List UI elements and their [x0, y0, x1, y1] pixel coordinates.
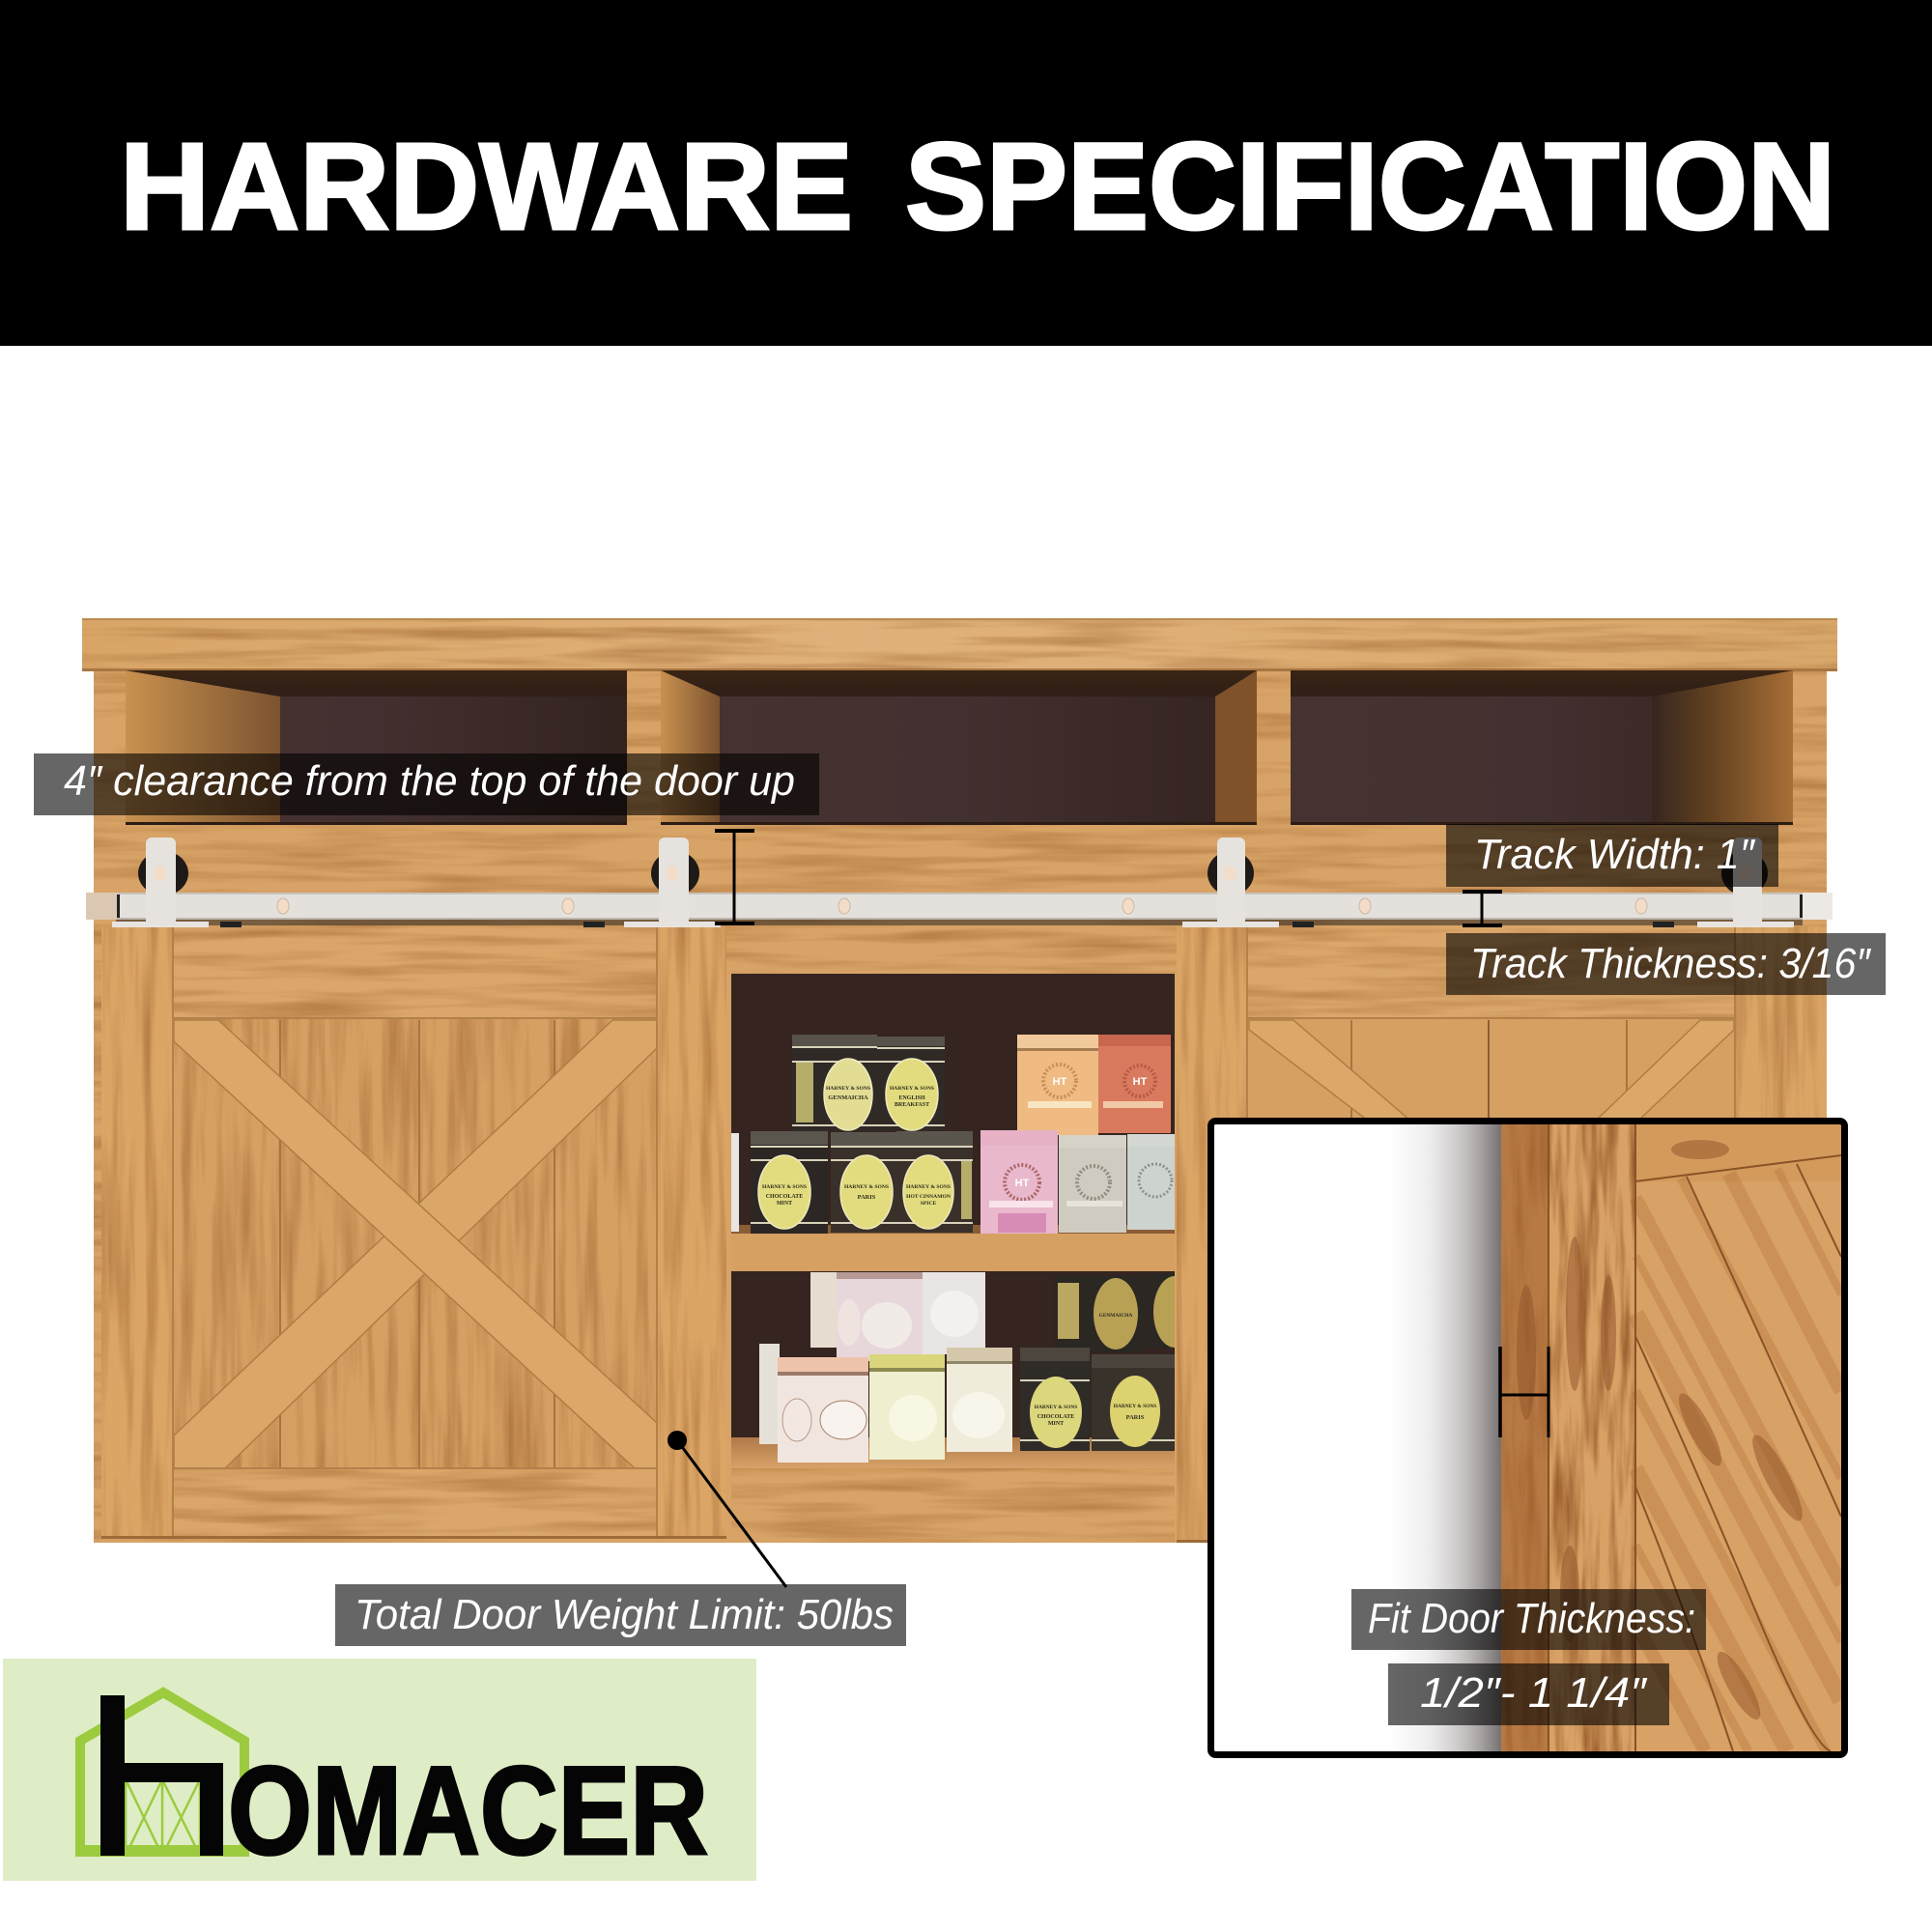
tin: Chocolate Mint lower: CHOCOLATE: [1037, 1414, 1074, 1420]
tin: English Breakfast: [877, 1037, 945, 1130]
weight pointer: [668, 1431, 786, 1587]
X brace: [174, 1020, 657, 1468]
tin: Chocolate Mint: [751, 1131, 828, 1234]
logo: Homacer: [3, 1659, 756, 1881]
callout: track thickness: Track Thickness: 3/16″: [1470, 940, 1871, 987]
measure: track width: [1463, 892, 1502, 925]
tin: English Breakfast: HARNEY & SONS: [890, 1086, 934, 1092]
tin: red: [1098, 1035, 1171, 1133]
measure: clearance height: [715, 831, 754, 923]
tin: Chocolate Mint: MINT: [777, 1201, 792, 1207]
logo door cross: [120, 1776, 205, 1856]
callout: clearance: 4″ clearance from the top of the door up: [64, 757, 795, 805]
tin: Genmaicha: [792, 1035, 877, 1131]
door panel: [173, 1018, 657, 1468]
tin: Paris lower: [1092, 1354, 1175, 1451]
tin: pink: [980, 1130, 1058, 1234]
cabinet floor: [731, 1437, 1175, 1468]
tea tins: [730, 1035, 1196, 1463]
tin: lilac patterned: [837, 1272, 923, 1361]
measure: door thickness: [1500, 1347, 1548, 1437]
tin: cream patterned: [947, 1348, 1012, 1452]
panel seams: [1548, 1124, 1841, 1751]
door close-up wood: [1501, 1124, 1841, 1751]
tin: Paris: HARNEY & SONS: [844, 1184, 889, 1190]
tin: white back lower: [759, 1344, 780, 1444]
tin: orange: HT: [1053, 1076, 1067, 1088]
logo wordmark: OMACER: [228, 1740, 708, 1881]
tin: Chocolate Mint: HARNEY & SONS: [762, 1184, 807, 1190]
track bolts: [277, 898, 1647, 914]
inset frame: [1211, 1121, 1845, 1754]
hanger 2: [624, 838, 721, 927]
tin: white right: [923, 1272, 985, 1354]
centre open shelves: [726, 974, 1177, 1542]
tin: orange: [1017, 1035, 1098, 1135]
right end stop: [1800, 893, 1833, 920]
hanger 1: [112, 838, 209, 927]
open cubby: centre: [661, 670, 1257, 825]
door panel: [1247, 1018, 1735, 1124]
tin: Chocolate Mint lower: MINT: [1048, 1421, 1064, 1427]
right barn door: [1177, 926, 1827, 1543]
tin: Chocolate Mint lower: [1020, 1348, 1090, 1451]
shelf board: [731, 1225, 1175, 1235]
hanger 4: [1697, 838, 1794, 927]
tin: Hot Cinnamon Spice: HARNEY & SONS: [906, 1184, 951, 1190]
stiles and rails: [101, 926, 173, 1538]
tin: white sliver: [731, 1133, 739, 1232]
tin: dark gold upper left: GENMAICHA: [1099, 1313, 1132, 1319]
title: HARDWARE: [120, 118, 853, 256]
small black spacers: [220, 922, 1674, 927]
tin: Chocolate Mint: CHOCOLATE: [766, 1194, 803, 1200]
tin: Paris lower: HARNEY & SONS: [1114, 1404, 1156, 1409]
tin: English Breakfast: ENGLISH: [898, 1095, 925, 1101]
left barn door: [101, 926, 726, 1539]
tin: dark gold upper left: [1055, 1275, 1145, 1352]
tin: Hot Cinnamon Spice: [896, 1131, 973, 1233]
tin: peach patterned: [778, 1357, 868, 1463]
logo H: [100, 1695, 223, 1856]
callout: door weight: Total Door Weight Limit: 50lbs: [355, 1591, 894, 1638]
tin: red: HT: [1133, 1076, 1148, 1088]
open cubby: right: [1291, 670, 1793, 825]
tin: Genmaicha: HARNEY & SONS: [826, 1086, 870, 1092]
tin: Chocolate Mint lower: HARNEY & SONS: [1035, 1405, 1077, 1410]
callout: thickness range: 1/2″- 1 1/4″: [1420, 1669, 1648, 1717]
callout: track width: Track Width: 1″: [1474, 831, 1755, 878]
diagonal wood grain: [1635, 1169, 1841, 1751]
tin: Hot Cinnamon Spice: HOT CINNAMON: [906, 1194, 951, 1200]
inset: door thickness close-up: [1211, 1121, 1845, 1754]
top board: [82, 618, 1837, 671]
hanger 3: [1182, 838, 1279, 927]
title: SPECIFICATION: [905, 118, 1835, 256]
callout: fit door thickness: [1351, 1589, 1706, 1650]
header band: [0, 0, 1932, 346]
tin: English Breakfast: BREAKFAST: [895, 1102, 929, 1108]
tin: Paris: PARIS: [858, 1194, 876, 1201]
tin: grey: [1059, 1135, 1126, 1233]
tin: yellow-green patterned: [869, 1354, 945, 1460]
tin: Paris lower: PARIS: [1126, 1414, 1145, 1421]
shadow fade: [1391, 1124, 1501, 1751]
tin: cream behind: [810, 1272, 838, 1348]
sliding track: [86, 838, 1833, 927]
tin: pink: HT: [1015, 1178, 1030, 1189]
tin: Paris: [831, 1132, 896, 1233]
cabinet body: [94, 670, 1827, 1543]
tin: Hot Cinnamon Spice: SPICE: [921, 1201, 937, 1207]
callout: thickness range: [1388, 1663, 1669, 1725]
open cubby: left: [126, 670, 627, 825]
partial X brace: [1249, 1020, 1734, 1121]
tin: Genmaicha: GENMAICHA: [828, 1094, 868, 1101]
logo house outline: [80, 1692, 244, 1853]
tin: dark gold upper right: [1147, 1273, 1196, 1349]
left end stop: [86, 893, 120, 920]
tin: pale blue-grey: [1127, 1134, 1175, 1230]
callout: track width: [1446, 824, 1778, 887]
callout: fit door thickness: Fit Door Thickness:: [1368, 1595, 1695, 1642]
cabinet: [82, 618, 1837, 1543]
dark knots: [1517, 1140, 1810, 1724]
